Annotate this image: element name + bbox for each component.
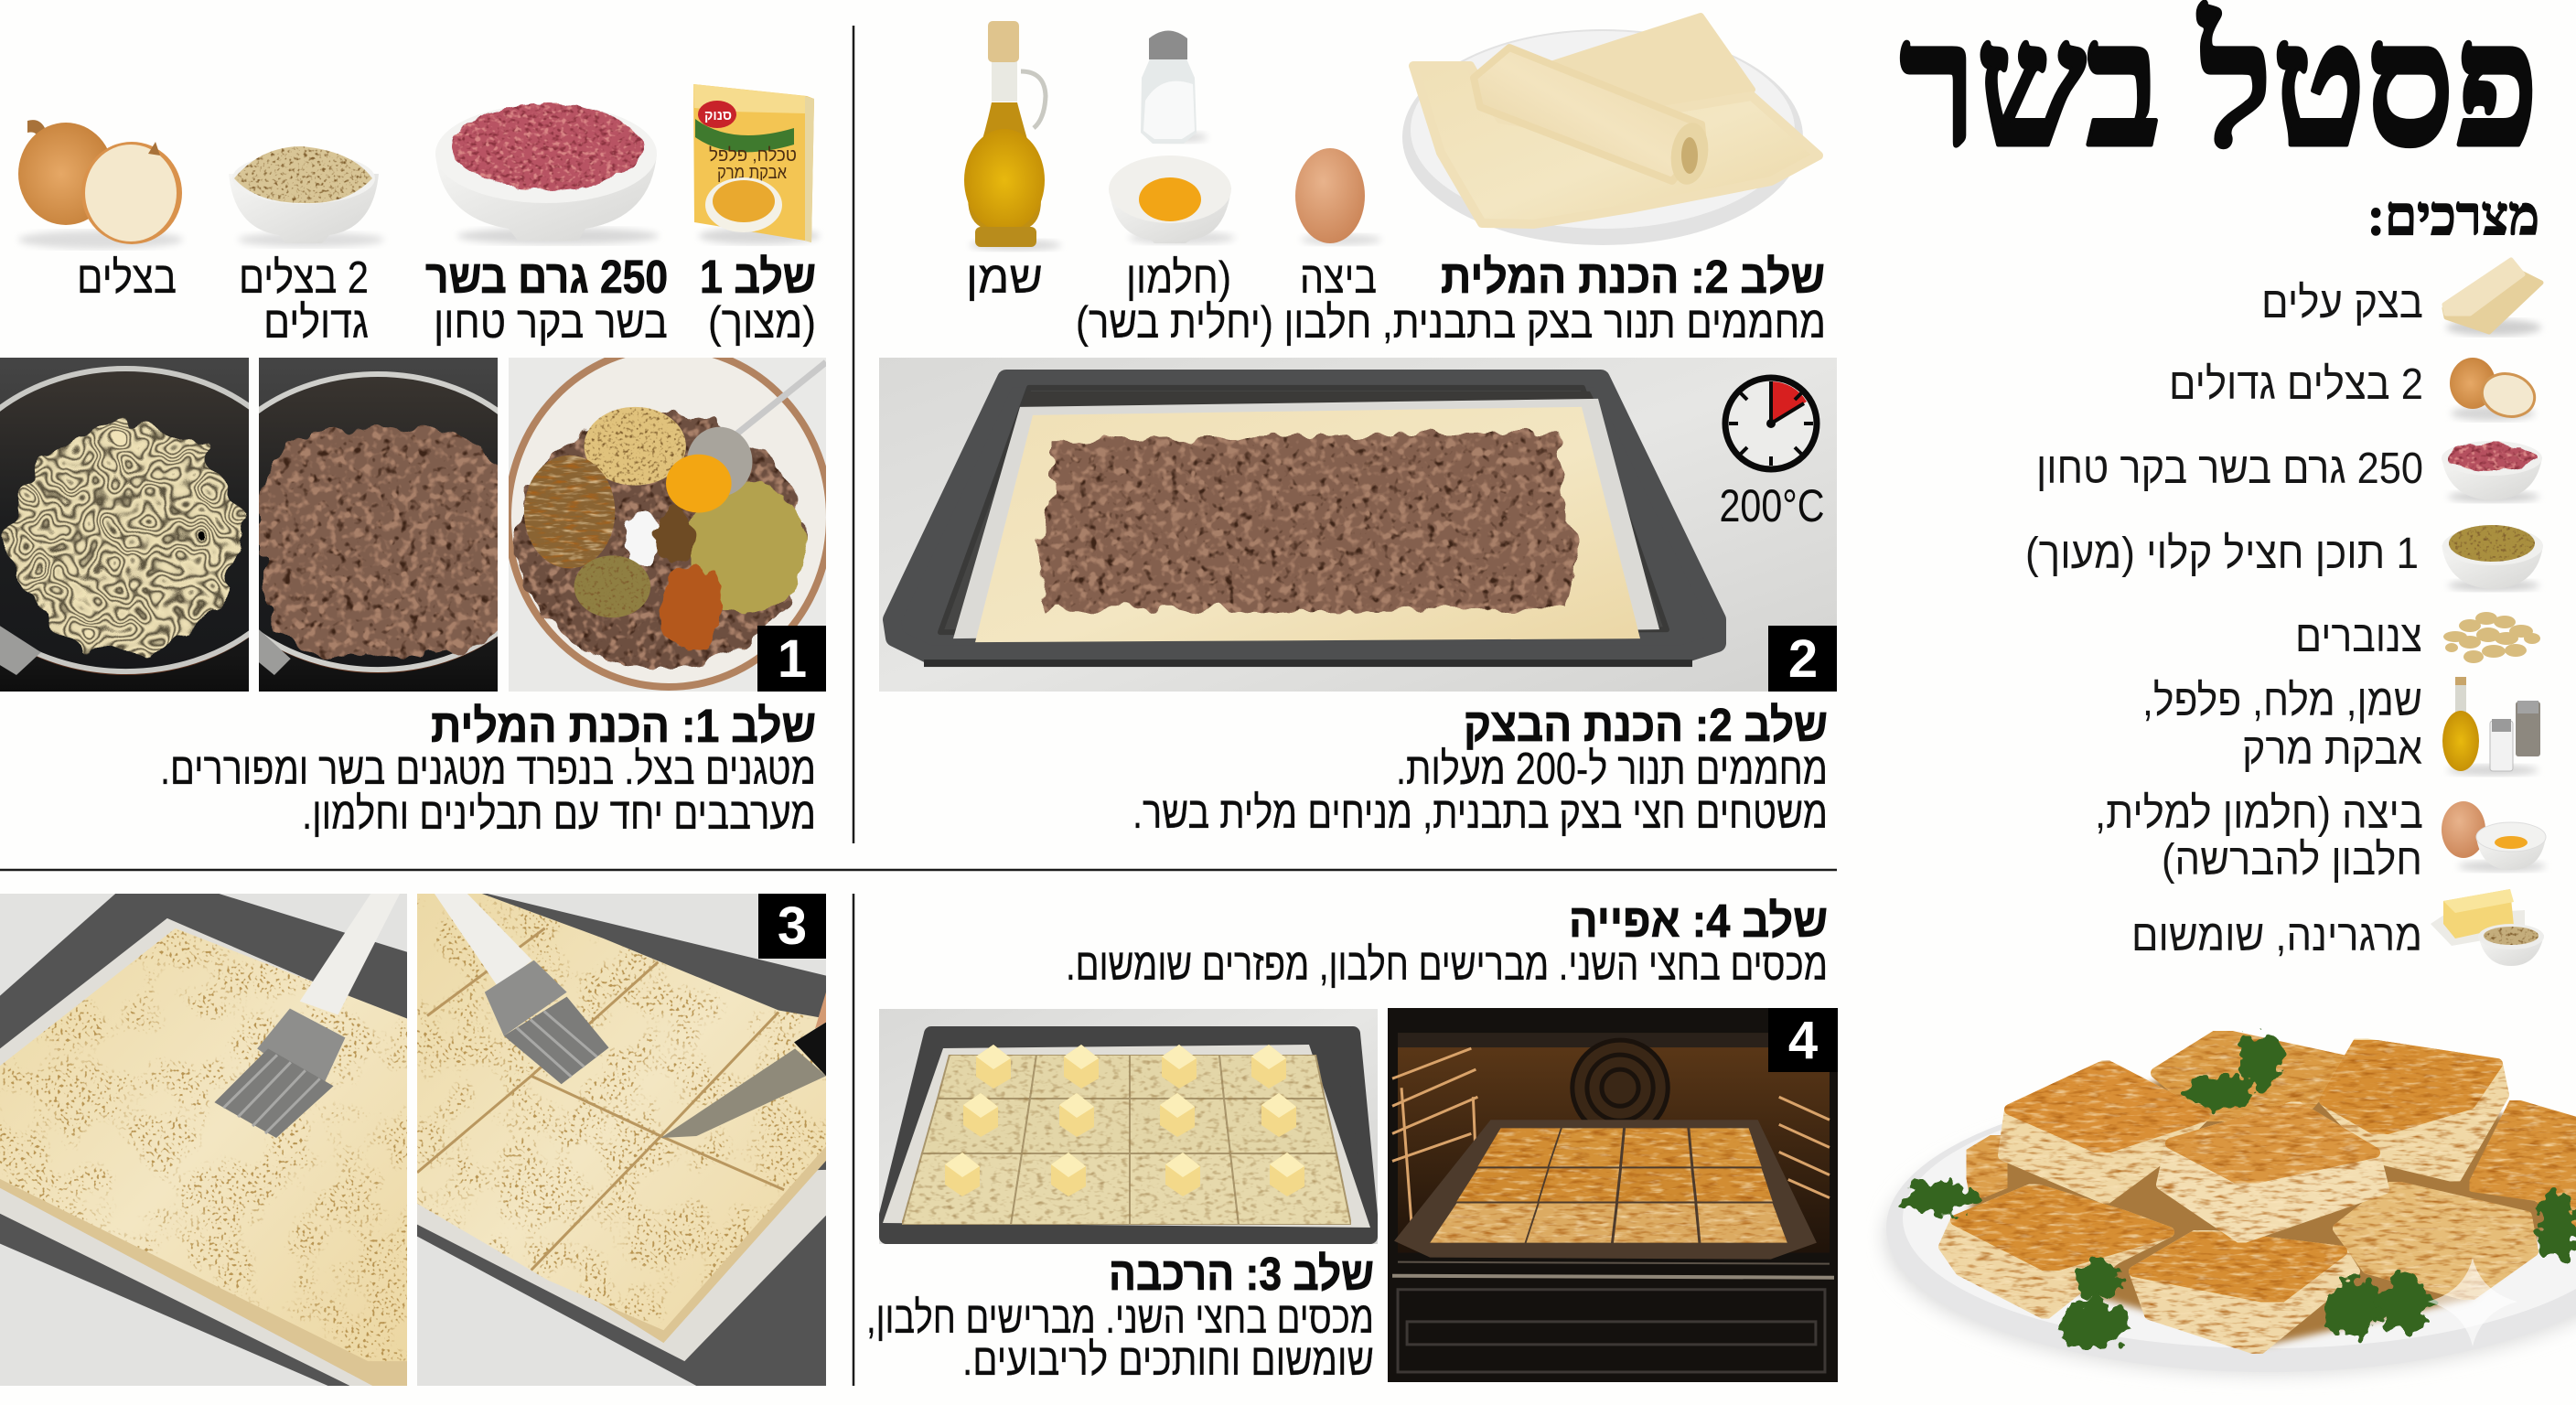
brush bbox=[435, 894, 609, 1084]
step badge 2: 2 bbox=[1788, 629, 1818, 689]
step 2 text: מחממים תנור ל-200 מעלות. bbox=[1396, 745, 1828, 794]
step 4 text: מכסים בחצי השני. מברישים חלבון, מפזרים שומשום. bbox=[1066, 940, 1828, 990]
green herb bbox=[574, 555, 650, 617]
step 1 headline: 250 גרם בשר bbox=[425, 251, 668, 303]
paprika bbox=[659, 565, 724, 649]
plate bbox=[1884, 1083, 2576, 1374]
step badge 3 bbox=[758, 894, 826, 959]
ingredient: pine nuts: צנוברים bbox=[2295, 613, 2422, 661]
step 2 filling headline bbox=[966, 251, 1826, 348]
oven timer icon bbox=[1725, 378, 1817, 469]
dark spice bbox=[655, 508, 695, 562]
ingredient: egg bbox=[2095, 789, 2546, 885]
step 3 text: שומשום וחותכים לריבועים. bbox=[962, 1335, 1374, 1385]
ingredient: roasted eggplant: 1 תוכן חציל קלוי (מעוך) bbox=[2025, 530, 2419, 578]
icon: seasoning box: טכלח, פלפל bbox=[709, 145, 797, 166]
sparkle mark bbox=[2428, 1258, 2517, 1346]
photo: filling on dough in tray bbox=[879, 358, 1837, 692]
meat filling bbox=[1039, 432, 1578, 610]
step 1 headline: (מצוך) bbox=[708, 298, 816, 348]
pine nuts bbox=[585, 407, 686, 486]
step 2 filling headline: שלב 2: הכנת המלית bbox=[1441, 251, 1825, 303]
step 1 headline: בשר בקר טחון bbox=[434, 298, 668, 348]
ingredient: onions: 2 בצלים גדולים bbox=[2169, 360, 2423, 409]
step badge 4: 4 bbox=[1788, 1011, 1818, 1070]
step 1 headline: 2 בצלים bbox=[239, 253, 369, 303]
ingredient: egg: חלבון להברשה) bbox=[2162, 836, 2422, 885]
photo: oven bbox=[1388, 1008, 1838, 1382]
knife bbox=[660, 992, 826, 1138]
step 1 headline: שלב 1 bbox=[700, 251, 816, 303]
step 2 filling headline: שמן bbox=[966, 253, 1043, 303]
ingredient: onions bbox=[2169, 358, 2539, 423]
ingredient: oil, salt, pepper: שמן, מלח, פלפל, bbox=[2142, 677, 2422, 725]
butter cubes bbox=[945, 1045, 1304, 1196]
ingredient: roasted eggplant bbox=[2025, 525, 2543, 591]
step 1 text: מערבבים יחד עם תבלינים וחלמון. bbox=[302, 789, 816, 839]
ingredients heading: מצרכים: bbox=[2367, 186, 2539, 246]
lower rack bbox=[1392, 1262, 1834, 1278]
step 1 text: מטגנים בצל. בנפרד מטגנים בשר ומפוררים. bbox=[160, 745, 816, 794]
step badge 1 bbox=[757, 626, 826, 692]
baked pastries bbox=[1430, 1128, 1787, 1243]
pastry grid bbox=[902, 1055, 1351, 1225]
step badge 2 bbox=[1768, 626, 1837, 692]
baking tray bbox=[1394, 1120, 1817, 1260]
icon: seasoning box bbox=[693, 84, 820, 244]
icon: yolk in bowl bbox=[1109, 156, 1235, 244]
step 4 text: שלב 4: אפייה bbox=[1569, 895, 1828, 947]
pastries bbox=[1944, 1034, 2576, 1350]
icon: bowl of raw beef bbox=[435, 104, 659, 244]
photo: onions frying bbox=[0, 358, 249, 692]
step 1 text bbox=[160, 700, 816, 839]
ingredient: ground beef bbox=[2036, 441, 2542, 502]
ingredient: pine nuts bbox=[2295, 612, 2540, 663]
step 3 text bbox=[866, 1248, 1374, 1385]
ingredients list bbox=[2025, 260, 2546, 966]
icon: bowl of seeds bbox=[229, 146, 384, 247]
icon: egg bbox=[1295, 148, 1381, 245]
step 4 text bbox=[1066, 895, 1828, 990]
icon: seasoning box: סנוק bbox=[704, 108, 732, 123]
ingredient: ground beef: 250 גרם בשר בקר טחון bbox=[2036, 445, 2423, 493]
step 2 text: שלב 2: הכנת הבצק bbox=[1464, 699, 1828, 751]
ingredient: puff pastry bbox=[2261, 260, 2541, 336]
top ingredients row: step 1 bbox=[18, 84, 820, 348]
salt bbox=[624, 512, 660, 566]
photo: butter squares on tray bbox=[879, 1009, 1378, 1244]
step 2 text: משטחים חצי בצק בתבנית, מניחים מלית בשר. bbox=[1132, 788, 1828, 838]
step 2 filling headline: (חלמון bbox=[1126, 253, 1231, 303]
step 2 text bbox=[1132, 699, 1828, 838]
spoon and yolk bbox=[666, 362, 826, 513]
photo: cutting into squares bbox=[417, 894, 826, 1386]
ingredient: puff pastry: בצק עלים bbox=[2261, 279, 2423, 327]
icon: onions bbox=[18, 120, 183, 249]
photo: beef frying bbox=[259, 358, 498, 692]
step 1 headline: בצלים bbox=[77, 253, 177, 303]
step 3 text: שלב 3: הרכבה bbox=[1109, 1248, 1374, 1300]
ingredient: margarine and sesame: מרגרינה, שומשום bbox=[2131, 912, 2422, 960]
racks bbox=[1392, 1048, 1830, 1226]
door bbox=[1398, 1290, 1825, 1372]
fan bbox=[1572, 1040, 1668, 1135]
eggplant mash bbox=[689, 481, 805, 616]
brush bbox=[214, 894, 400, 1138]
step badge 4 bbox=[1768, 1008, 1838, 1072]
icon: seasoning box: אבקת מרק bbox=[717, 163, 787, 183]
step 3 text: מכסים בחצי השני. מברישים חלבון, bbox=[866, 1293, 1374, 1343]
step badge 3: 3 bbox=[778, 896, 807, 956]
ingredient: oil, salt, pepper bbox=[2142, 677, 2540, 776]
temperature label: 200°C bbox=[1720, 480, 1824, 531]
caramelised onions bbox=[524, 456, 615, 568]
icon: dough on plate bbox=[1402, 16, 1819, 245]
top ingredients row: step 2 bbox=[964, 16, 1826, 348]
step 2 filling headline: ביצה bbox=[1300, 253, 1377, 303]
photo: filling in bowl bbox=[509, 358, 826, 692]
step 1 headline: גדולים bbox=[263, 298, 369, 348]
icon: salt shaker bbox=[1141, 31, 1208, 144]
step 1 text: שלב 1: הכנת המלית bbox=[431, 700, 816, 752]
step 1 headline bbox=[77, 251, 816, 348]
dividers bbox=[0, 26, 1837, 1386]
step 2 filling headline: מחממים תנור בצק בתבנית, חלבון (יחלית בשר) bbox=[1076, 298, 1826, 348]
beef base bbox=[517, 413, 804, 669]
icon: oil bottle bbox=[964, 21, 1061, 251]
parsley bbox=[1901, 1034, 2576, 1349]
cut lines bbox=[417, 928, 784, 1270]
ingredient: oil, salt, pepper: אבקת מרק bbox=[2242, 725, 2422, 774]
ingredient: egg: ביצה (חלמון למלית, bbox=[2095, 789, 2423, 838]
step badge 1: 1 bbox=[778, 629, 807, 689]
ingredient: margarine and sesame bbox=[2131, 889, 2544, 966]
finished dish: pastry plate bbox=[1879, 1028, 2576, 1379]
photo: brushing top dough bbox=[0, 894, 407, 1386]
